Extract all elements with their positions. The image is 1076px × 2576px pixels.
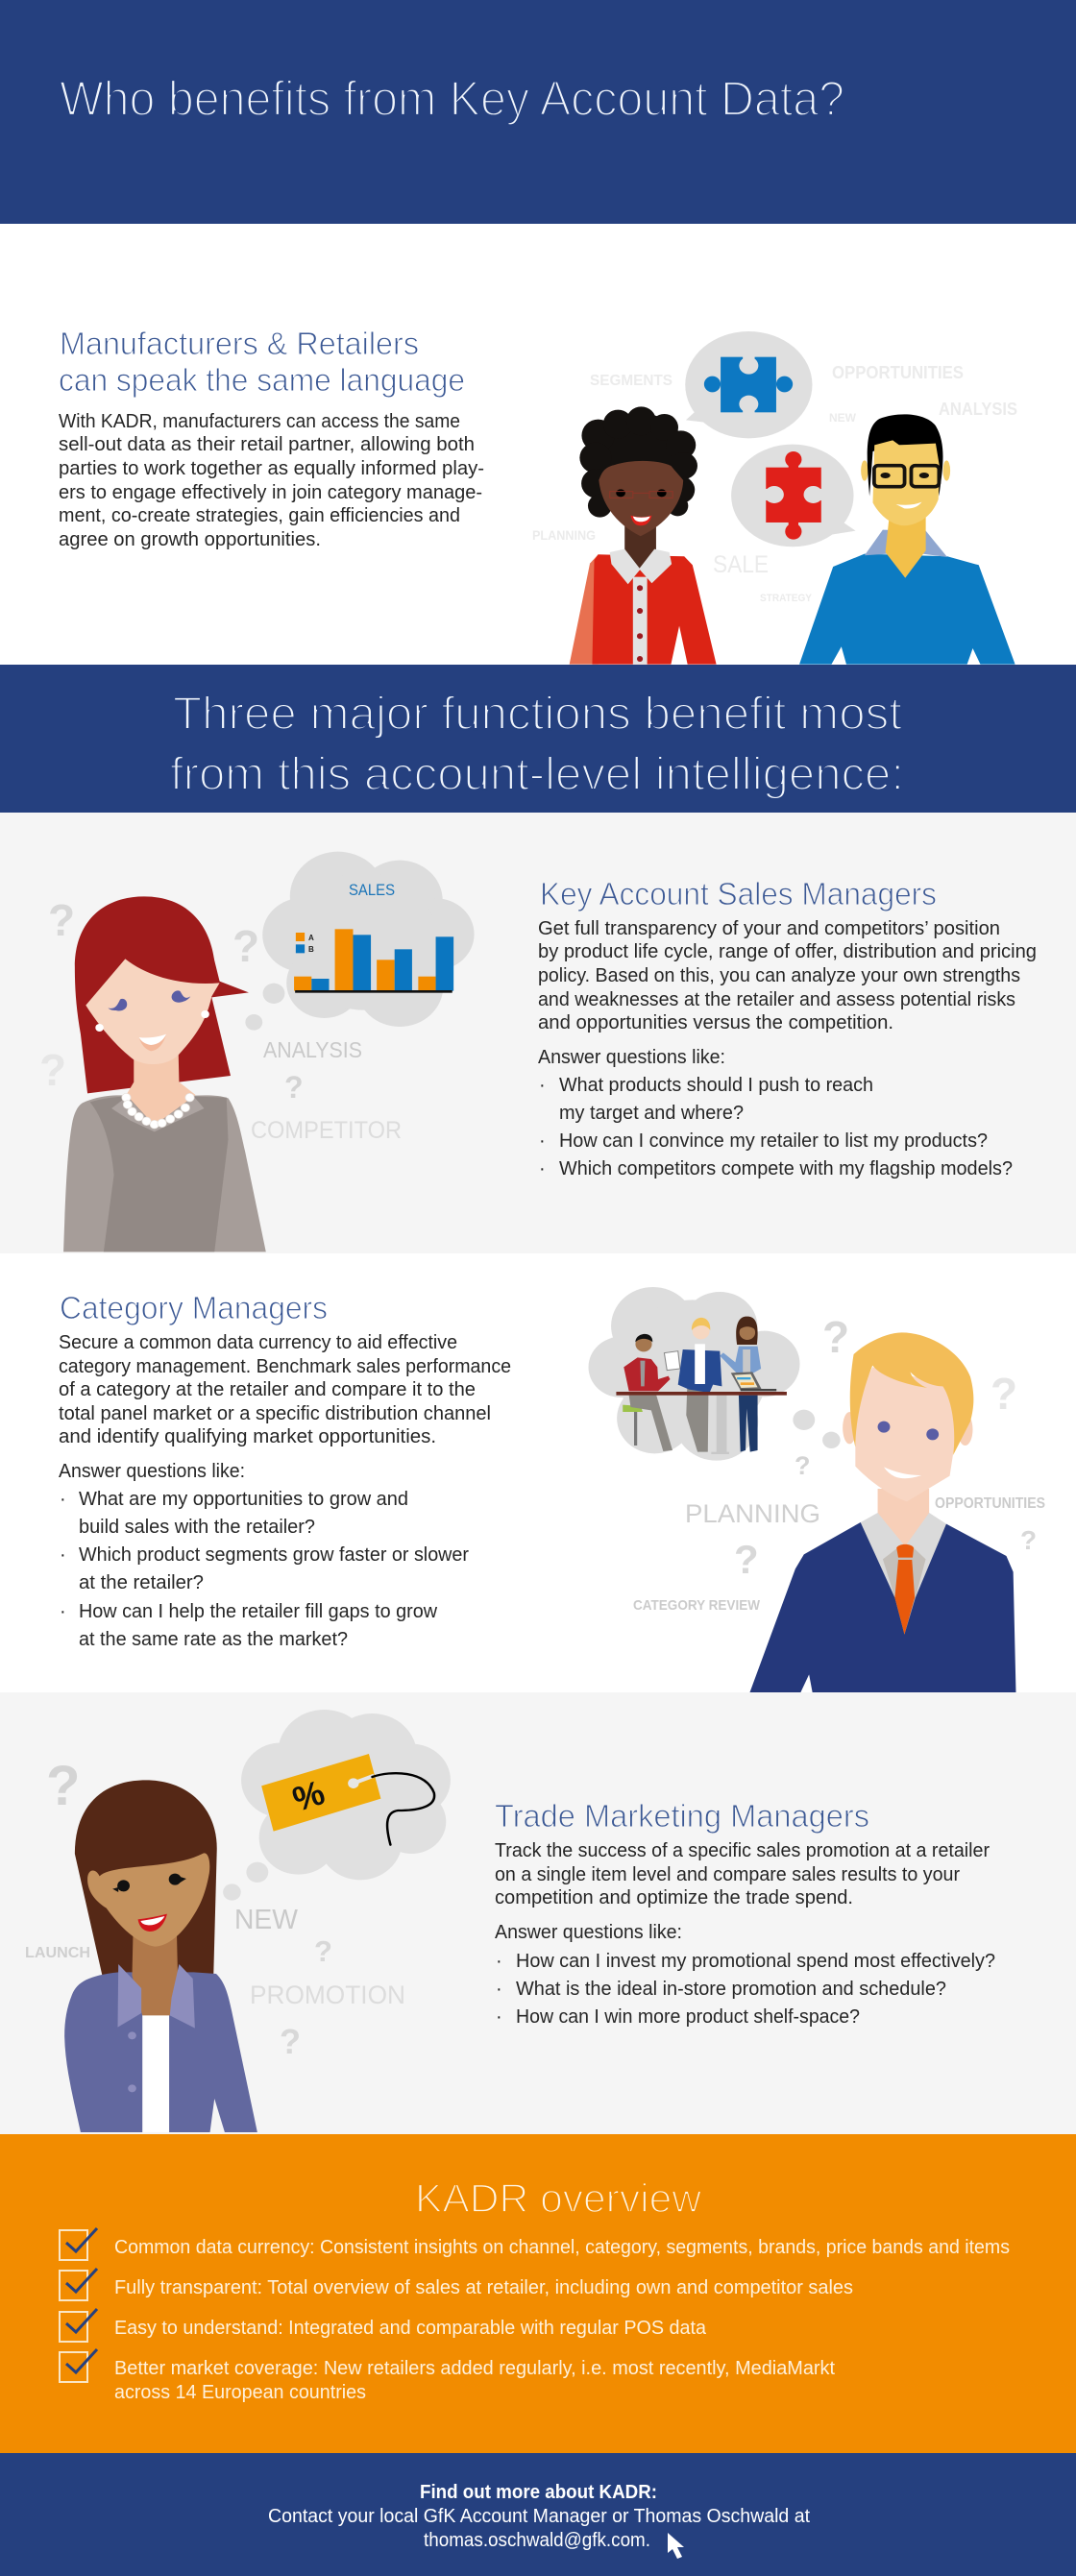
text block: category questions: What are my opportunities to grow and — [79, 1489, 408, 1510]
text block: category questions: at the retailer? — [79, 1572, 204, 1593]
text block: category description: and identify qualifying market opportunities. — [59, 1426, 436, 1447]
text block: key account description: and weaknesses at the retailer and assess potential risks — [538, 989, 1015, 1010]
text block: key account description: by product life cycle, range of offer, distribution and pricing — [538, 941, 1037, 962]
icon: red puzzle bubble — [731, 445, 856, 547]
question marks and keywords: ? — [39, 1045, 66, 1095]
text block: overview list: Fully transparent: Total overview of sales at retailer, including own and competitor sales — [114, 2277, 853, 2298]
text block: trade marketing questions: How can I invest my promotional spend most effectively? — [516, 1951, 995, 1972]
illustration: woman with red hair and sales chart — [63, 852, 475, 1252]
heading: key account sales managers: Key Account Sales Managers — [540, 876, 937, 911]
heading: trade marketing managers: Trade Marketing Managers — [495, 1798, 869, 1834]
illustration: blond man body — [749, 1332, 1015, 1692]
text block: trade marketing description: Track the success of a specific sales promotion at a retailer — [495, 1840, 990, 1861]
text block: KADR intro: agree on growth opportunities. — [59, 529, 321, 550]
panel: trade marketing managers — [0, 1692, 1076, 2134]
panel: key account sales managers — [0, 813, 1076, 1253]
faint keywords: SALE — [713, 551, 769, 578]
text block: overview list: Better market coverage: New retailers added regularly, i.e. most recently, MediaMarkt — [114, 2358, 835, 2379]
text block: category questions — [59, 1461, 469, 1650]
text block: category questions: How can I help the retailer fill gaps to grow — [79, 1601, 438, 1622]
question marks and keywords: OPPORTUNITIES — [935, 1495, 1045, 1512]
title: Who benefits from Key Account Data? — [60, 71, 844, 126]
chart labels: A — [308, 934, 314, 942]
text block: key account description: Get full transparency of your and competitors’ position — [538, 918, 1000, 939]
question marks and keywords: ? — [314, 1934, 332, 1968]
panel: header banner — [0, 0, 1076, 224]
question marks and keywords: COMPETITOR — [251, 1117, 402, 1144]
heading: three major functions — [170, 689, 904, 800]
question marks and keywords: LAUNCH — [25, 1945, 90, 1961]
meeting table and stool — [717, 1396, 726, 1452]
faint keywords: PLANNING — [532, 527, 596, 543]
question marks and keywords — [39, 895, 402, 1144]
heading: manufacturers and retailers — [59, 326, 465, 398]
text block: overview list: Common data currency: Consistent insights on channel, category, segments, brands, price bands and items — [114, 2237, 1010, 2258]
text block: category description — [59, 1332, 511, 1447]
text block: KADR intro — [59, 411, 484, 550]
illustration: woman in red — [570, 406, 717, 665]
question marks and keywords: PLANNING — [685, 1499, 820, 1528]
heading: three major functions: from this account-level intelligence: — [170, 749, 904, 800]
text block: category description: category management. Benchmark sales performance — [59, 1356, 511, 1377]
text block: trade marketing description: on a single item level and compare sales results to your — [495, 1864, 960, 1885]
text block: overview list: Easy to understand: Integrated and comparable with regular POS data — [114, 2318, 707, 2339]
text block: trade marketing description — [495, 1840, 990, 1908]
faint keywords: OPPORTUNITIES — [832, 363, 964, 382]
text block: contact: Contact your local GfK Account Manager or Thomas Oschwald at — [268, 2506, 810, 2527]
text block: trade marketing questions: Answer questions like: — [495, 1922, 682, 1943]
heading: manufacturers and retailers: can speak the same language — [59, 362, 465, 398]
question marks and keywords — [25, 1755, 405, 2061]
standing man — [686, 1385, 708, 1452]
text block: category questions: at the same rate as the market? — [79, 1629, 348, 1650]
text block: KADR intro: parties to work together as equally informed play- — [59, 458, 484, 479]
faint keywords: ANALYSIS — [939, 400, 1017, 419]
text block: category questions: Which product segments grow faster or slower — [79, 1544, 469, 1566]
text block: key account description — [538, 918, 1037, 1033]
text block: category questions: · — [60, 1489, 66, 1510]
question marks and keywords: ? — [284, 1070, 304, 1105]
icon: price tag cloud — [223, 1710, 451, 1901]
faint keywords: SEGMENTS — [590, 373, 672, 389]
chart labels: B — [308, 945, 314, 954]
text block: key account questions: my target and where? — [559, 1103, 744, 1124]
text block: overview list: across 14 European countries — [114, 2382, 366, 2403]
icon: checkbox 1 — [60, 2228, 97, 2260]
text block: KADR intro: sell-out data as their retail partner, allowing both — [59, 434, 475, 455]
text block: KADR intro: With KADR, manufacturers can access the same — [59, 411, 460, 432]
faint keywords: NEW — [829, 411, 857, 425]
text block: contact — [268, 2482, 810, 2551]
panel: three major functions banner — [0, 665, 1076, 813]
text block: trade marketing description: competition and optimize the trade spend. — [495, 1887, 853, 1908]
text block: trade marketing questions: How can I win more product shelf-space? — [516, 2006, 860, 2028]
icon: checkbox 3 — [60, 2309, 97, 2342]
question marks and keywords: ? — [822, 1312, 849, 1362]
text block: key account questions — [538, 1047, 1013, 1179]
text block: category description: of a category at the retailer and compare it to the — [59, 1379, 476, 1400]
seated man — [629, 1396, 672, 1451]
text block: key account questions: · — [539, 1158, 546, 1179]
text block: key account questions: · — [539, 1075, 546, 1096]
text block: category description: Secure a common data currency to aid effective — [59, 1332, 457, 1353]
text block: overview list — [114, 2237, 1010, 2403]
illustration: two people with puzzle pieces — [570, 331, 1015, 665]
text block: key account questions: Answer questions like: — [538, 1047, 725, 1068]
question marks and keywords: NEW — [234, 1905, 299, 1935]
icon: meeting cloud — [588, 1287, 841, 1461]
question marks and keywords: ? — [48, 895, 75, 945]
question marks and keywords: ? — [232, 921, 259, 971]
text block: key account questions: What products should I push to reach — [559, 1075, 873, 1096]
question marks and keywords: ANALYSIS — [263, 1037, 362, 1062]
question marks and keywords — [633, 1312, 1045, 1614]
text block: trade marketing questions: · — [496, 2006, 502, 2028]
question marks and keywords: ? — [795, 1451, 811, 1480]
icon: cursor arrow — [668, 2533, 684, 2559]
text block: trade marketing questions: · — [496, 1979, 502, 2000]
text block: category questions: · — [60, 1601, 66, 1622]
question marks and keywords: CATEGORY REVIEW — [633, 1597, 761, 1614]
text block: category questions: Answer questions like: — [59, 1461, 245, 1482]
heading: KADR overview: KADR overview — [415, 2175, 702, 2221]
panel: category managers — [0, 1253, 1076, 1692]
text block: key account description: policy. Based on this, you can analyze your own strengths — [538, 965, 1020, 986]
panel: KADR overview — [0, 2134, 1076, 2453]
text block: category description: total panel market or a specific distribution channel — [59, 1403, 491, 1424]
icon: percent sign: % — [288, 1772, 330, 1819]
panel: footer contact — [0, 2453, 1076, 2576]
icon: checkbox 4 — [60, 2349, 97, 2382]
icon: sales chart cloud — [245, 852, 475, 1031]
chart labels — [308, 881, 395, 954]
question marks and keywords: ? — [1020, 1525, 1037, 1555]
question marks and keywords: ? — [734, 1537, 759, 1582]
faint keywords: STRATEGY — [760, 593, 813, 604]
text block: key account questions: How can I convince my retailer to list my products? — [559, 1130, 988, 1152]
heading: category managers: Category Managers — [60, 1290, 328, 1325]
text block: category questions: build sales with the retailer? — [79, 1517, 315, 1538]
text block: key account description: and opportunities versus the competition. — [538, 1012, 893, 1033]
illustration: woman with price tag thought cloud — [64, 1710, 451, 2132]
text block: contact: thomas.oschwald@gfk.com. — [424, 2530, 650, 2551]
text block: category questions: · — [60, 1544, 66, 1566]
text block: key account questions: Which competitors compete with my flagship models? — [559, 1158, 1013, 1179]
text block: key account questions: · — [539, 1130, 546, 1152]
text block: trade marketing questions: · — [496, 1951, 502, 1972]
question marks and keywords: ? — [280, 2022, 301, 2061]
panel: manufacturers and retailers — [0, 224, 1076, 665]
illustration: woman body — [63, 896, 266, 1252]
standing woman — [736, 1317, 758, 1345]
illustration: man with meeting thought cloud — [588, 1287, 1015, 1692]
text block: trade marketing questions: What is the ideal in-store promotion and schedule? — [516, 1979, 946, 2000]
text block: trade marketing questions — [495, 1922, 995, 2028]
icon: blue puzzle bubble — [685, 331, 812, 438]
heading: three major functions: Three major functions benefit most — [173, 689, 902, 740]
laptop — [731, 1372, 762, 1390]
chart labels: SALES — [349, 881, 395, 899]
question marks and keywords: ? — [990, 1369, 1017, 1419]
illustration: woman body — [64, 1780, 257, 2132]
heading: manufacturers and retailers: Manufacturers & Retailers — [60, 326, 419, 361]
illustration: man in blue — [799, 414, 1015, 665]
faint keywords — [532, 363, 1017, 604]
icon: checkbox 2 — [60, 2269, 97, 2300]
text block: KADR intro: ment, co-create strategies, gain efficiencies and — [59, 505, 460, 526]
question marks and keywords: PROMOTION — [250, 1981, 405, 2009]
question marks and keywords: ? — [46, 1755, 80, 1817]
text block: contact: Find out more about KADR: — [420, 2482, 657, 2503]
text block: KADR intro: ers to engage effectively in join category manage- — [59, 482, 482, 503]
